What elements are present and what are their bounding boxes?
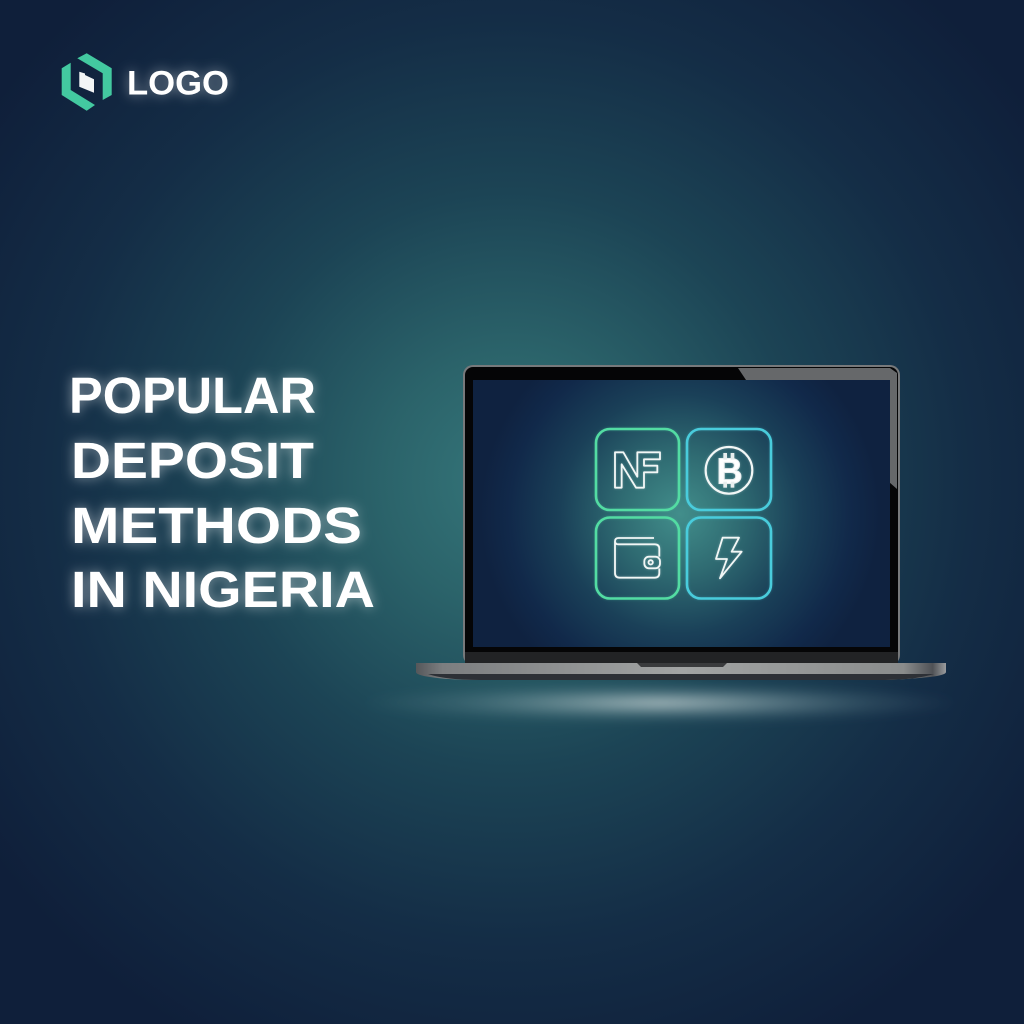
tile: bitcoin: B xyxy=(717,450,743,491)
laptop screen xyxy=(473,380,890,647)
tile: wallet xyxy=(596,518,679,598)
tile: NF xyxy=(596,429,679,510)
logo wordmark: LOGO xyxy=(127,64,229,102)
tile: lightning bolt xyxy=(687,518,771,598)
title: DEPOSIT xyxy=(71,432,314,489)
laptop xyxy=(416,365,946,680)
title: METHODS xyxy=(71,497,362,554)
tile: bitcoin xyxy=(687,429,771,510)
laptop lid xyxy=(463,365,900,665)
logo xyxy=(62,53,229,111)
title: POPULAR xyxy=(69,367,316,424)
payment icon grid xyxy=(596,429,771,598)
logo icon: hexagon xyxy=(62,53,112,111)
light reflection under laptop xyxy=(360,683,960,723)
title: IN NIGERIA xyxy=(71,561,375,618)
title xyxy=(69,367,375,618)
laptop base xyxy=(416,663,946,680)
